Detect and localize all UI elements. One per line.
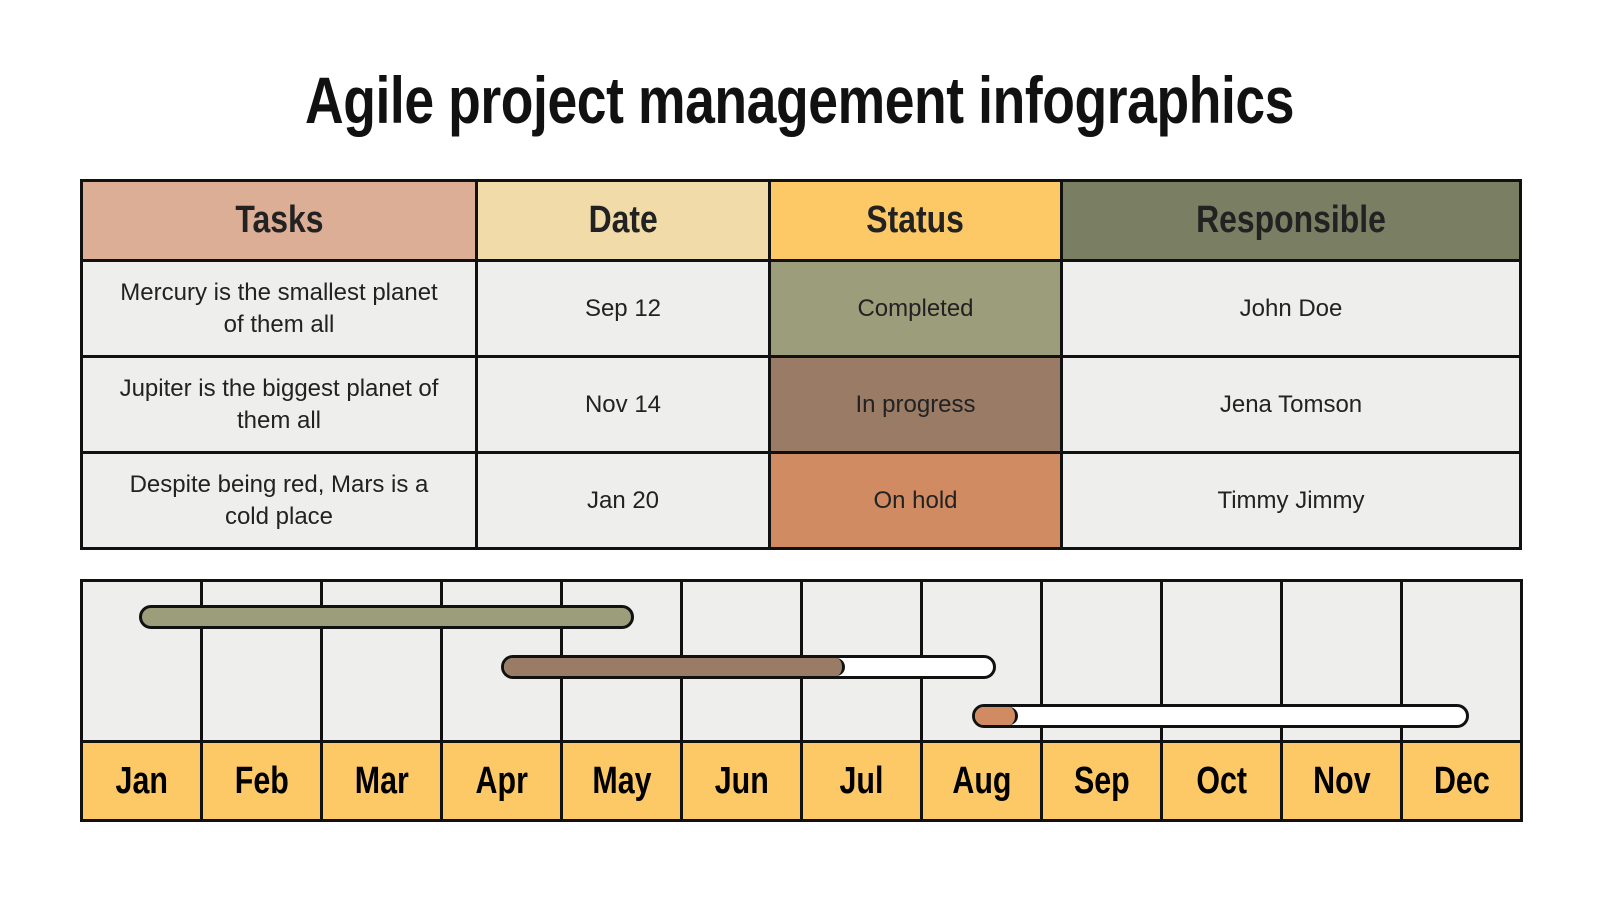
table: tasks: Sep 12	[585, 294, 661, 322]
table: tasks: Date	[588, 199, 658, 241]
month labels: Jul	[840, 760, 883, 802]
table: tasks: John Doe	[1240, 294, 1342, 322]
month labels: Nov	[1313, 760, 1370, 802]
month labels: Oct	[1196, 760, 1247, 802]
table: tasks: Jupiter is the biggest planet of	[120, 374, 438, 402]
gantt chart	[80, 579, 1523, 822]
table: tasks: Tasks	[235, 199, 323, 241]
month labels: Dec	[1434, 760, 1489, 802]
table: tasks: In progress	[855, 390, 976, 418]
month labels	[83, 740, 1520, 819]
table: tasks: Despite being red, Mars is a	[130, 470, 428, 498]
bar: task 1 completed	[139, 605, 634, 629]
table: tasks: On hold	[873, 486, 958, 514]
month labels: Jan	[115, 760, 168, 802]
table: tasks: Responsible	[1196, 199, 1386, 241]
table: tasks: Status	[867, 199, 964, 241]
table: tasks: Jena Tomson	[1220, 390, 1362, 418]
table: tasks: of them all	[224, 310, 334, 338]
month labels: Feb	[234, 760, 289, 802]
bar: task 3 on hold	[972, 704, 1469, 728]
bar: task 2 in progress	[501, 655, 996, 679]
month labels: Apr	[475, 760, 528, 802]
table: tasks: them all	[237, 406, 321, 434]
table: tasks: Completed	[857, 294, 974, 322]
month labels: Sep	[1074, 760, 1129, 802]
month labels: May	[592, 760, 651, 802]
month labels: Aug	[952, 760, 1011, 802]
table: tasks	[80, 179, 1522, 550]
table: tasks: Jan 20	[587, 486, 659, 514]
table: tasks: Mercury is the smallest planet	[120, 278, 438, 306]
title: Agile project management infographics	[305, 63, 1295, 137]
month labels: Jun	[714, 760, 769, 802]
table: tasks: cold place	[225, 502, 333, 530]
table: tasks: Timmy Jimmy	[1217, 486, 1365, 514]
table: tasks: Nov 14	[585, 390, 661, 418]
month labels: Mar	[354, 760, 409, 802]
